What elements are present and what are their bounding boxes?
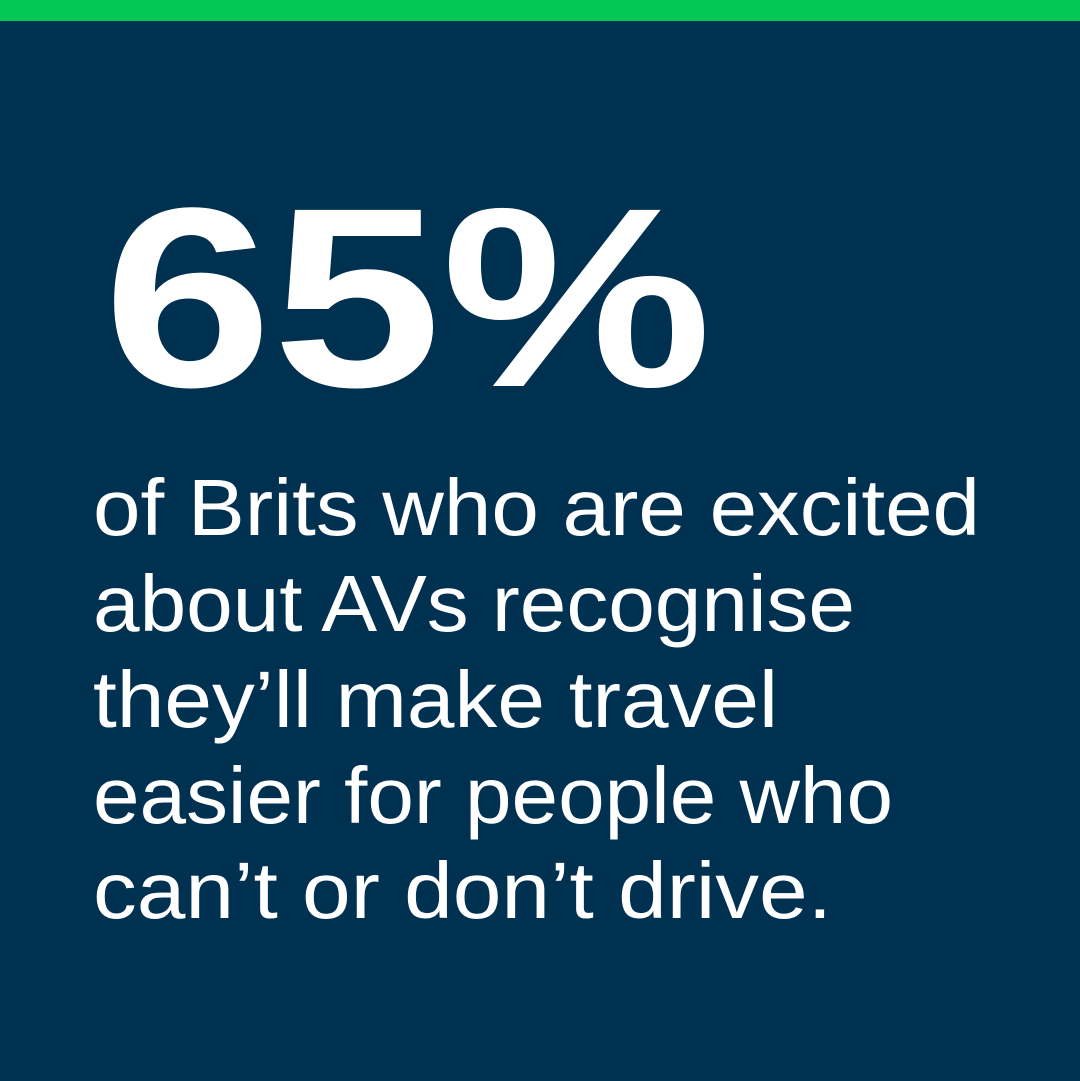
headline statistic: 65% xyxy=(103,155,712,441)
body text: they’ll make travel xyxy=(93,655,778,744)
top accent bar xyxy=(0,0,1080,21)
body text: easier for people who xyxy=(93,751,893,840)
body text: of Brits who are excited xyxy=(93,463,980,552)
body text: can’t or don’t drive. xyxy=(93,846,832,935)
body text xyxy=(93,463,980,935)
body text: about AVs recognise xyxy=(93,559,855,648)
